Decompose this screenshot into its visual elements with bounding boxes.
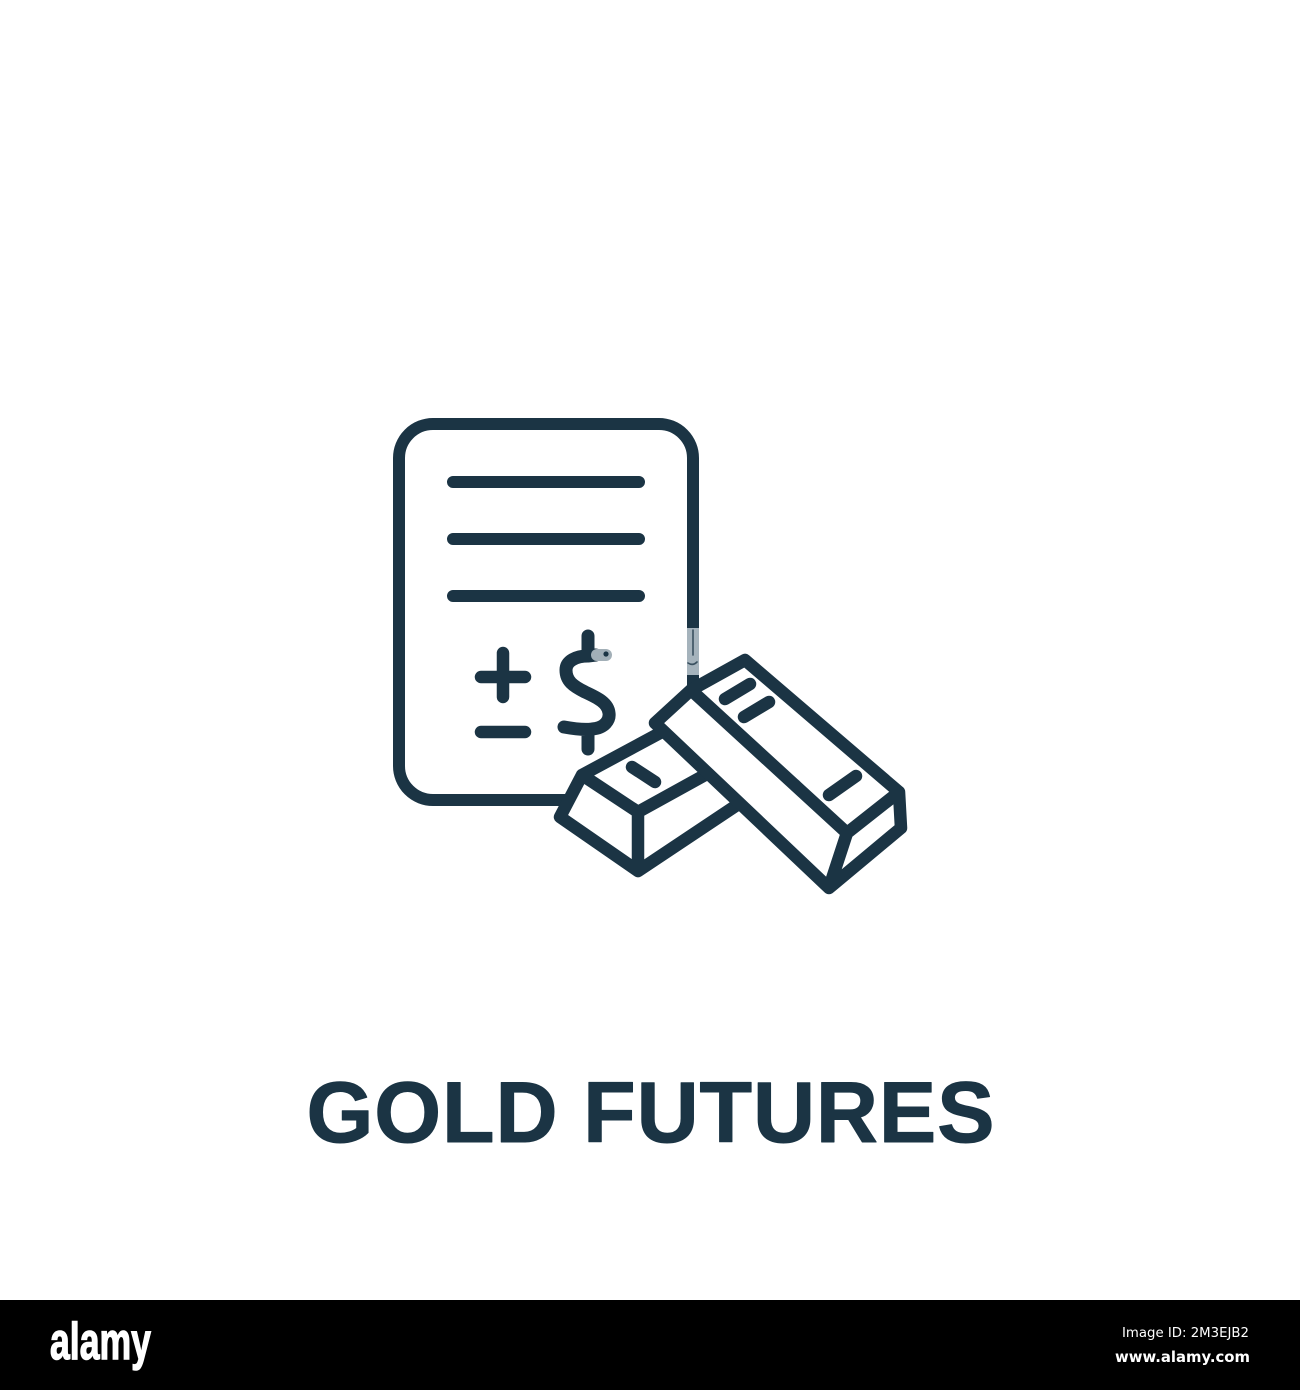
icon: plus-minus sign (481, 653, 525, 732)
title: GOLD FUTURES (306, 1065, 994, 1161)
icon: large bar marks (725, 684, 856, 795)
icon: document outline (399, 424, 693, 800)
icon: watermark remnant on large bar (791, 779, 801, 789)
icon: watermark remnant on document edge (687, 628, 699, 675)
image id: Image ID: 2M3EJB2 (1122, 1325, 1249, 1341)
footer logo: alamy (50, 1313, 151, 1371)
icon: gold futures document and gold bars (399, 424, 901, 888)
icon: dollar sign (564, 636, 609, 749)
footer bar (0, 1300, 1300, 1390)
website: www.alamy.com (1115, 1348, 1250, 1366)
icon: watermark remnant on dollar sign (597, 651, 609, 657)
icon: document text lines (453, 482, 639, 596)
icon: large gold bar (655, 660, 901, 888)
icon: small gold bar (560, 733, 737, 871)
icon: small bar mark (632, 767, 655, 782)
